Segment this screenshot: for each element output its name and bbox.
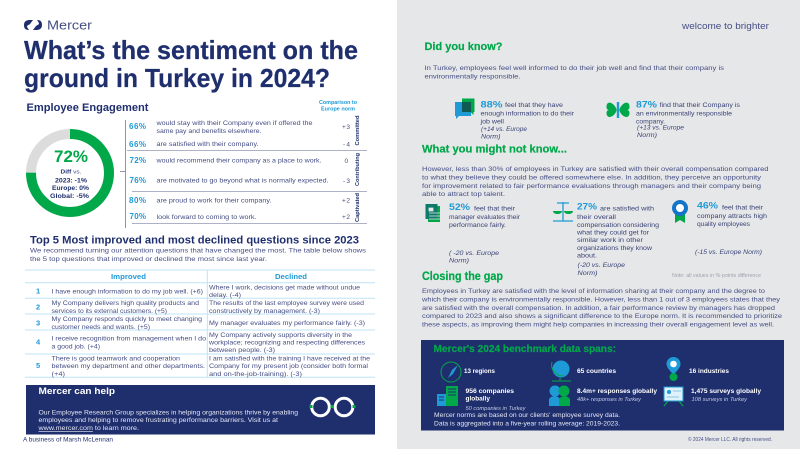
stat: 27%: 27% xyxy=(577,202,598,212)
heading: closing the gap: Closing the gap xyxy=(422,271,503,283)
panel: Mercer can help xyxy=(26,385,375,434)
rotated labels: engagement levels: Committed xyxy=(355,115,361,146)
icon: map pin xyxy=(666,357,680,381)
note: units: Note: all values in %-points difference xyxy=(672,273,761,279)
stat: 27%: Norm) xyxy=(578,270,598,277)
heading: top 5 questions: Top 5 Most improved and most declined questions since 2023 xyxy=(30,234,359,246)
donut chart: 72% engagement: Global: -5% xyxy=(50,194,90,200)
panel: Mercer can help: Mercer can help xyxy=(38,386,115,397)
icon: people xyxy=(549,386,570,406)
panel: Mercer can help: employees and helping to remove frustrating performance barriers. Visit us at xyxy=(38,417,278,424)
text block: norms note: Mercer norms are based on our clients' employee survey data. xyxy=(434,412,620,419)
stat: 27%: what they could get for xyxy=(576,230,650,236)
table: improved and declined: between my department and other departments. xyxy=(52,363,205,370)
stat: 87% xyxy=(636,100,741,139)
text block: closing paragraph: which their company is environmentally responsible. However, less than 1 out of 3 employees states that they xyxy=(421,296,781,304)
stat: 88%: 88% xyxy=(480,100,503,110)
text block: compensation paragraph xyxy=(422,166,769,198)
stat: companies: globally xyxy=(466,396,490,402)
rotated labels: engagement levels xyxy=(355,116,361,222)
stat: 27%: are satisfied with xyxy=(600,206,654,212)
table: improved and declined: Company for my present job (consider both formal xyxy=(209,363,368,370)
stat: 52%: ( -20 vs. Europe xyxy=(449,250,499,257)
icon: survey board xyxy=(664,387,683,406)
donut chart: 72% engagement: 2023: -1% xyxy=(55,178,88,184)
table: improved and declined: 3 xyxy=(36,318,40,328)
rows: engagement questions: +2 xyxy=(342,214,350,221)
dividers xyxy=(127,150,367,224)
stat: countries: 65 countries xyxy=(577,368,616,375)
table: improved and declined: (+4) xyxy=(52,371,65,378)
text block: table intro: the 5 top questions that improved or declined the most since last year. xyxy=(30,256,267,263)
table: improved and declined: My Company actively supports diversity in the xyxy=(209,332,352,339)
table: improved and declined: My manager evaluates my performance fairly. (-3) xyxy=(209,320,365,327)
rotated labels: engagement levels: Contributing xyxy=(355,153,361,186)
rows: engagement questions: are satisfied with their company. xyxy=(156,141,259,148)
table: improved and declined: Improved xyxy=(111,272,146,281)
table: improved and declined: I receive recognition from management when I do xyxy=(52,336,206,342)
stat: 27%: organizations they know xyxy=(577,245,652,252)
heading: did you know: Did you know? xyxy=(424,41,503,53)
legend: comparison to Europe norm: Europe norm xyxy=(321,106,355,112)
section: closing the gap xyxy=(421,271,782,328)
table: improved and declined: My Company delivers high quality products and xyxy=(52,300,199,307)
tagline: welcome to brighter: welcome to brighter xyxy=(681,21,769,32)
text block: closing paragraph: are satisfied with the overall compensation. In addition, a fair performance review by managers has dropped xyxy=(422,305,775,312)
rows: engagement questions: 70% xyxy=(130,212,146,221)
rotated labels: engagement levels: Captivated xyxy=(355,193,361,222)
stat: responses xyxy=(577,388,657,403)
donut chart: 72% engagement: Europe: 0% xyxy=(52,186,90,192)
stat: surveys xyxy=(691,388,761,403)
stat: 88%: (+14 vs. Europe xyxy=(481,126,527,133)
stat: 87%: find that their Company is xyxy=(660,102,741,109)
icon: document xyxy=(426,204,440,222)
text block: did you know intro: environmentally responsible. xyxy=(424,74,521,80)
rows: engagement questions: same pay and benefits elsewhere. xyxy=(156,128,262,135)
icon: chat bubbles xyxy=(455,98,474,119)
stat: 46%: 46% xyxy=(697,200,719,212)
panel: right background xyxy=(397,0,800,449)
stat: 52%: 52% xyxy=(449,202,471,213)
title: ground in Turkey in 2024? xyxy=(24,63,330,93)
rows: engagement questions: -3 xyxy=(343,178,350,185)
text block: compensation paragraph: able to attract top talent. xyxy=(422,191,505,198)
rows: engagement questions: would recommend their company as a place to work. xyxy=(155,158,322,164)
text block: norms note: Data is aggregated into a five-year rolling average: 2019-2023. xyxy=(434,420,620,428)
stat: responses: 48k+ responses in Turkey xyxy=(577,397,641,403)
stat: 27%: their overall xyxy=(577,214,617,221)
stat: 52%: performance fairly. xyxy=(449,222,506,229)
stat: 87%: an environmentally responsible xyxy=(636,110,732,118)
table: improved and declined: delay. (-4) xyxy=(209,292,241,299)
text block: closing paragraph: these aspects, as improving them might help companies in increasing their overall engagement level as well. xyxy=(422,322,774,328)
stat: regions: 13 regions xyxy=(464,368,495,375)
stat: companies: 956 companies xyxy=(466,388,514,395)
stat: 46%: (-15 vs. Europe Norm) xyxy=(695,249,762,256)
stat: 27%: compensation considering xyxy=(577,222,659,229)
icon: compass xyxy=(441,362,461,382)
rows: engagement questions: -4 xyxy=(343,142,350,148)
text block: did you know intro: In Turkey, employees feel well informed to do their job well and find that their company is xyxy=(424,65,725,72)
table: improved and declined: I have enough information to do my job well. (+6) xyxy=(52,288,203,295)
text block: closing paragraph: compared to 2023 and also shows a significant difference to the Europe norm. It is recommended to prioritize xyxy=(422,313,782,320)
text block: closing paragraph: Employees in Turkey are satisfied with the level of information sharing at their company and the degree to xyxy=(422,288,765,295)
table: improved and declined: My Company responds quickly to meet changing xyxy=(52,316,202,323)
table: improved and declined xyxy=(25,270,375,378)
text block: table intro: We recommend turning our attention questions that have changed the most. The table below shows xyxy=(30,248,367,254)
table: improved and declined: 4 xyxy=(36,338,41,346)
table: improved and declined: a good job. (+4) xyxy=(52,344,100,350)
rows: engagement questions: +3 xyxy=(342,124,350,131)
logo: Mercer: Mercer xyxy=(47,18,93,32)
stat: 46%: quality employees xyxy=(697,221,751,228)
rows: engagement questions: 80% xyxy=(129,196,146,205)
table: improved and declined: 2 xyxy=(36,302,40,312)
title xyxy=(24,35,358,93)
rows: engagement questions: 72% xyxy=(130,156,146,165)
table: improved and declined: constructively by management. (-3) xyxy=(209,308,320,315)
title: What’s the sentiment on the xyxy=(24,35,358,65)
table: improved and declined: 1 xyxy=(36,286,40,296)
stat: 46% xyxy=(695,200,767,256)
stat: 27% xyxy=(576,202,659,277)
legend: comparison to Europe norm: Comparison to xyxy=(319,100,358,106)
rows: engagement questions: 76% xyxy=(130,176,146,185)
table: improved and declined: 5 xyxy=(36,361,40,370)
stat: 88%: enough information to do their xyxy=(480,110,575,118)
rows: engagement questions: +2 xyxy=(342,198,350,204)
logo: Mercer xyxy=(24,18,93,32)
icon: scale xyxy=(553,202,573,221)
section: what you might not know xyxy=(422,144,769,277)
stat: 87%: Norm) xyxy=(637,132,657,139)
text block: compensation paragraph: However, less than 30% of employees in Turkey are satisfied with their overall compensation compared xyxy=(422,166,769,173)
panel: benchmark data xyxy=(421,340,784,430)
donut chart: 72% engagement: 72% xyxy=(54,147,88,166)
donut chart: 72% engagement: Diff vs. xyxy=(60,170,82,176)
icon: butterfly leaf xyxy=(606,102,630,118)
heading: benchmark data spans: Mercer's 2024 benchmark data spans: xyxy=(434,343,616,355)
stat: companies: 50 companies in Turkey xyxy=(466,406,526,412)
text block: compensation paragraph: for improvement related to fair performance evaluations through managers and their company being xyxy=(422,183,761,190)
text block: did you know intro xyxy=(424,65,725,80)
text block: compensation paragraph: to what they believe they could be offered somewhere else. In addition, they perceive an opportunity xyxy=(422,174,762,182)
rows: engagement questions: are motivated to go beyond what is normally expected. xyxy=(156,178,329,184)
text block: table intro xyxy=(30,248,367,263)
stat: 52%: Norm) xyxy=(449,258,469,264)
stat: 88%: Norm) xyxy=(481,134,500,140)
stat: industries: 16 industries xyxy=(689,368,729,375)
table: improved and declined: customer needs and wants. (+5) xyxy=(52,324,150,331)
stat: 52%: feel that their xyxy=(474,206,516,212)
panel: Mercer can help: Our Employee Research Group specializes in helping organizations thrive by enabling xyxy=(38,410,298,416)
rows: engagement questions: are proud to work for their company. xyxy=(156,198,272,204)
table: improved and declined: between people. (-3) xyxy=(209,347,275,354)
rows: engagement questions: look forward to coming to work. xyxy=(156,214,257,221)
footer: business of Marsh McLennan: A business of Marsh McLennan xyxy=(23,438,113,444)
panel: employee engagement xyxy=(26,100,367,228)
stat: surveys: 1,475 surveys globally xyxy=(691,388,761,395)
rows: engagement questions: 66% xyxy=(129,122,146,131)
stat: 88% xyxy=(479,100,575,140)
bracket line xyxy=(120,120,126,228)
table: improved and declined: Where I work, decisions get made without undue xyxy=(209,284,360,292)
stat: 27%: similar work in other xyxy=(577,237,644,244)
legend: comparison to Europe norm xyxy=(319,100,358,112)
rows: engagement questions: 66% xyxy=(129,140,146,149)
heading: what you might not know: What you might not know... xyxy=(422,144,567,156)
text block: closing paragraph xyxy=(421,288,782,328)
stat: 27%: about. xyxy=(577,252,597,260)
stat: 88%: feel that they have xyxy=(505,102,563,109)
section: did you know xyxy=(424,41,741,140)
stat: companies xyxy=(466,388,526,412)
icon: buildings xyxy=(437,386,458,406)
table: improved and declined: workplace; recognizing and respecting differences xyxy=(208,340,365,346)
stat: 88%: job well xyxy=(479,118,505,126)
icon: award badge xyxy=(674,202,686,223)
footer: copyright: © 2024 Mercer LLC. All rights reserved. xyxy=(688,436,772,443)
rows: engagement questions: would stay with their Company even if offered the xyxy=(155,120,313,127)
table: improved and declined: services to its external customers. (+5) xyxy=(52,308,167,315)
table: improved and declined: The results of the last employee survey were used xyxy=(209,300,364,307)
donut chart: 72% engagement xyxy=(31,134,109,212)
table: improved and declined: Declined xyxy=(275,272,307,281)
heading: employee engagement: Employee Engagement xyxy=(26,102,149,114)
table: improved and declined: There is good teamwork and cooperation xyxy=(52,356,180,362)
stat: 46%: feel that their xyxy=(722,204,764,212)
stat: 52%: manager evaluates their xyxy=(449,214,521,221)
stat: responses: 8.4m+ responses globally xyxy=(577,388,657,395)
table: improved and declined: and on-the-job-training). (-3) xyxy=(209,371,302,378)
stat: 87%: 87% xyxy=(636,100,658,110)
rows: engagement questions: 0 xyxy=(344,158,348,165)
stat: 52% xyxy=(449,202,521,264)
stat: 46%: company attracts high xyxy=(697,213,767,220)
icon: linked rings xyxy=(310,398,356,416)
icon: globe xyxy=(552,360,571,381)
rows: engagement questions xyxy=(129,120,350,221)
table: improved and declined: I am satisfied with the training I have received at the xyxy=(209,356,370,362)
stat: surveys: 108 surveys in Turkey xyxy=(692,397,747,403)
text block: norms note xyxy=(434,412,620,428)
stat: 87%: company. xyxy=(636,118,665,126)
stat: 87%: (+13 vs. Europe xyxy=(637,124,684,132)
panel: Mercer can help: www.mercer.com to learn more. xyxy=(37,425,139,432)
stat: 27%: (-20 vs. Europe xyxy=(578,262,625,269)
